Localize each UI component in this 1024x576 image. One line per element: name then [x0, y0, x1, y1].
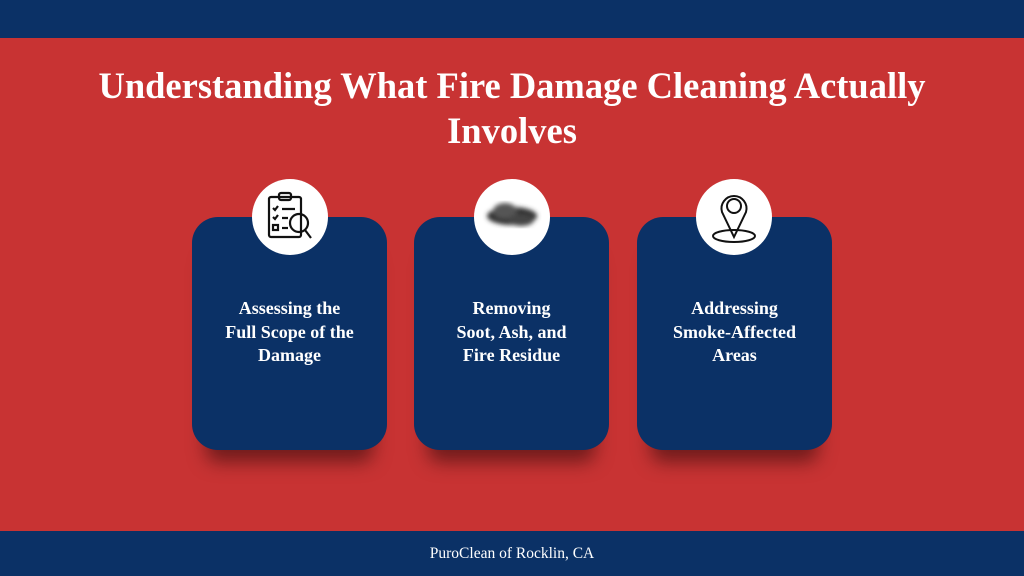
- card 2: Fire Residue: [463, 345, 560, 365]
- icon: clipboard: [252, 179, 328, 255]
- card 3: [637, 217, 832, 450]
- title: [98, 65, 926, 151]
- top band: [0, 0, 1024, 38]
- card 1: Full Scope of the: [225, 322, 354, 342]
- footer band: [0, 531, 1024, 576]
- title: Involves: [447, 110, 577, 151]
- card 3: Smoke-Affected: [673, 322, 796, 342]
- icon: location pin: [696, 179, 772, 255]
- card 2: Soot, Ash, and: [456, 322, 567, 342]
- card 2: [414, 217, 609, 450]
- card 1: Assessing the: [239, 298, 340, 318]
- card 3: Addressing: [691, 298, 778, 318]
- card 1: Damage: [258, 345, 321, 365]
- card 2: Removing: [472, 298, 550, 318]
- card 3: Areas: [712, 345, 757, 365]
- card 1: [192, 217, 387, 450]
- icon: smoke: [474, 179, 550, 255]
- title: Understanding What Fire Damage Cleaning Actually: [98, 65, 926, 106]
- footer text: PuroClean of Rocklin, CA: [430, 545, 594, 562]
